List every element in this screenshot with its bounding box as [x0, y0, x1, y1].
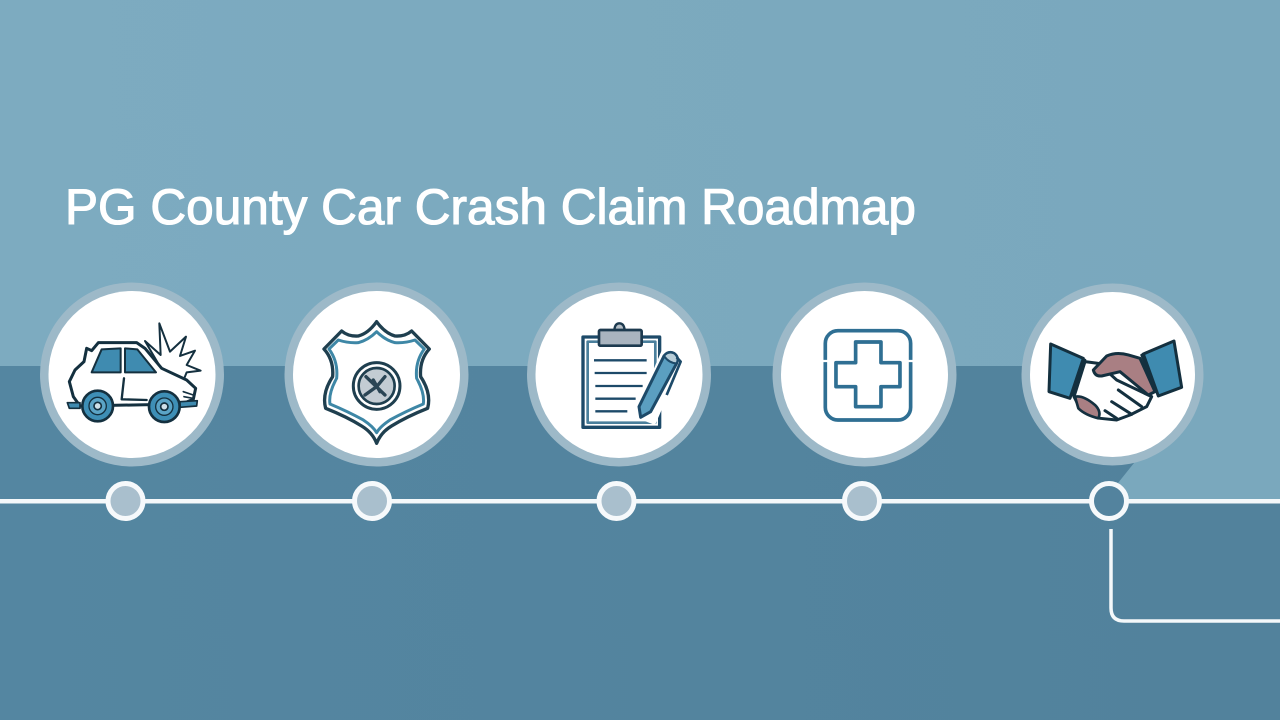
timeline dot 4 [844, 484, 880, 518]
step 1: car crash [40, 282, 224, 518]
timeline dot 2 [354, 484, 390, 518]
icon circle [527, 282, 711, 466]
icon circle [40, 282, 224, 466]
icon: police shield [324, 322, 429, 443]
step 5: settlement [1022, 284, 1204, 518]
icon: clipboard and pen [583, 323, 685, 427]
icon circle [284, 282, 468, 466]
icon circle [1022, 284, 1204, 466]
title: PG County Car Crash Claim Roadmap [65, 179, 916, 235]
timeline dot 5 [1092, 484, 1126, 518]
timeline dot 3 [599, 484, 634, 518]
icon: crashed car [67, 323, 201, 422]
icon: handshake [1049, 341, 1182, 420]
step 2: police report [284, 282, 468, 518]
icon: medical cross [822, 331, 914, 420]
timeline line [0, 499, 1280, 504]
icon circle [772, 282, 956, 466]
connector line [1111, 529, 1280, 621]
step 3: file paperwork [527, 282, 711, 518]
step 4: medical care [772, 282, 956, 518]
timeline dot 1 [108, 484, 143, 518]
